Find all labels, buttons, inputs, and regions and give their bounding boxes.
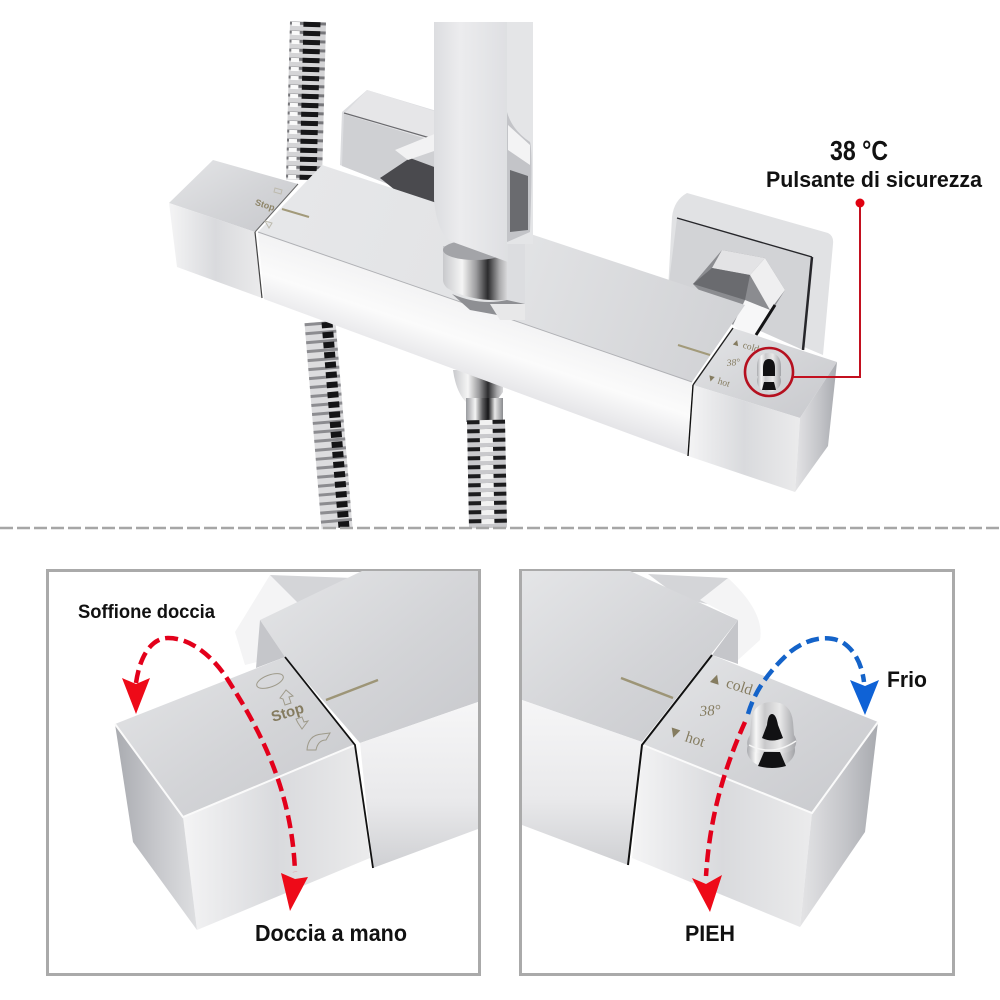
left cap of bar — [169, 160, 298, 298]
right cap of bar: 38° — [725, 357, 741, 369]
right wall bracket — [668, 193, 833, 355]
upper hose behind the bar — [292, 22, 312, 180]
right cap of bar: ▼ hot — [705, 373, 731, 390]
lower right hose — [453, 370, 503, 528]
temperature labels: ▲ cold — [706, 669, 755, 699]
knob top face — [115, 657, 355, 817]
shower arm — [434, 22, 533, 262]
diverter engraving — [255, 671, 330, 750]
knob front face — [632, 745, 812, 927]
thermostat button — [747, 702, 796, 768]
lower left hose — [320, 322, 344, 528]
right cap of bar — [688, 328, 837, 492]
gold mark — [326, 680, 378, 700]
body top face — [522, 571, 738, 742]
panel: temperature control — [520, 570, 954, 974]
main thermostatic bar — [258, 165, 745, 455]
gold mark left — [282, 209, 309, 217]
gold mark — [621, 678, 673, 698]
label: PIEH: PIEH — [685, 921, 735, 946]
body front face — [360, 702, 478, 868]
red arrow — [692, 722, 745, 912]
red rotation arrow — [122, 638, 308, 911]
divider — [0, 527, 1000, 529]
knob top face — [643, 655, 878, 813]
temperature labels: ▲ cold — [730, 337, 760, 355]
stop label: Stop — [254, 197, 277, 213]
label: Pulsante di sicurezza: Pulsante di sicurezza — [766, 167, 982, 192]
diverter engraving: Stop — [269, 700, 306, 726]
body top face — [260, 571, 478, 743]
label: Doccia a mano: Doccia a mano — [255, 920, 407, 946]
panel: shower diverter — [48, 570, 480, 974]
panel: temperature control: ▼ hot — [665, 723, 708, 751]
bar front face — [258, 232, 692, 455]
knob side face — [115, 724, 197, 930]
background pipe piece — [235, 575, 353, 665]
body front face — [522, 700, 642, 865]
knob front face — [183, 745, 370, 930]
left wall bracket — [340, 90, 440, 205]
background pipe piece — [648, 574, 761, 664]
bar top face — [258, 165, 745, 382]
label: Frio: Frio — [887, 667, 927, 692]
panel: temperature control: 38° — [698, 703, 721, 720]
gold mark right — [678, 345, 710, 355]
label: Soffione doccia: Soffione doccia — [78, 601, 215, 623]
callout: safety button — [745, 198, 864, 396]
body side — [256, 620, 285, 668]
shower arm mount — [443, 240, 525, 320]
knob side face — [800, 722, 878, 927]
heading: 38 °C: 38 °C — [830, 135, 888, 166]
blue arrow — [748, 638, 879, 715]
safety button — [757, 353, 781, 392]
